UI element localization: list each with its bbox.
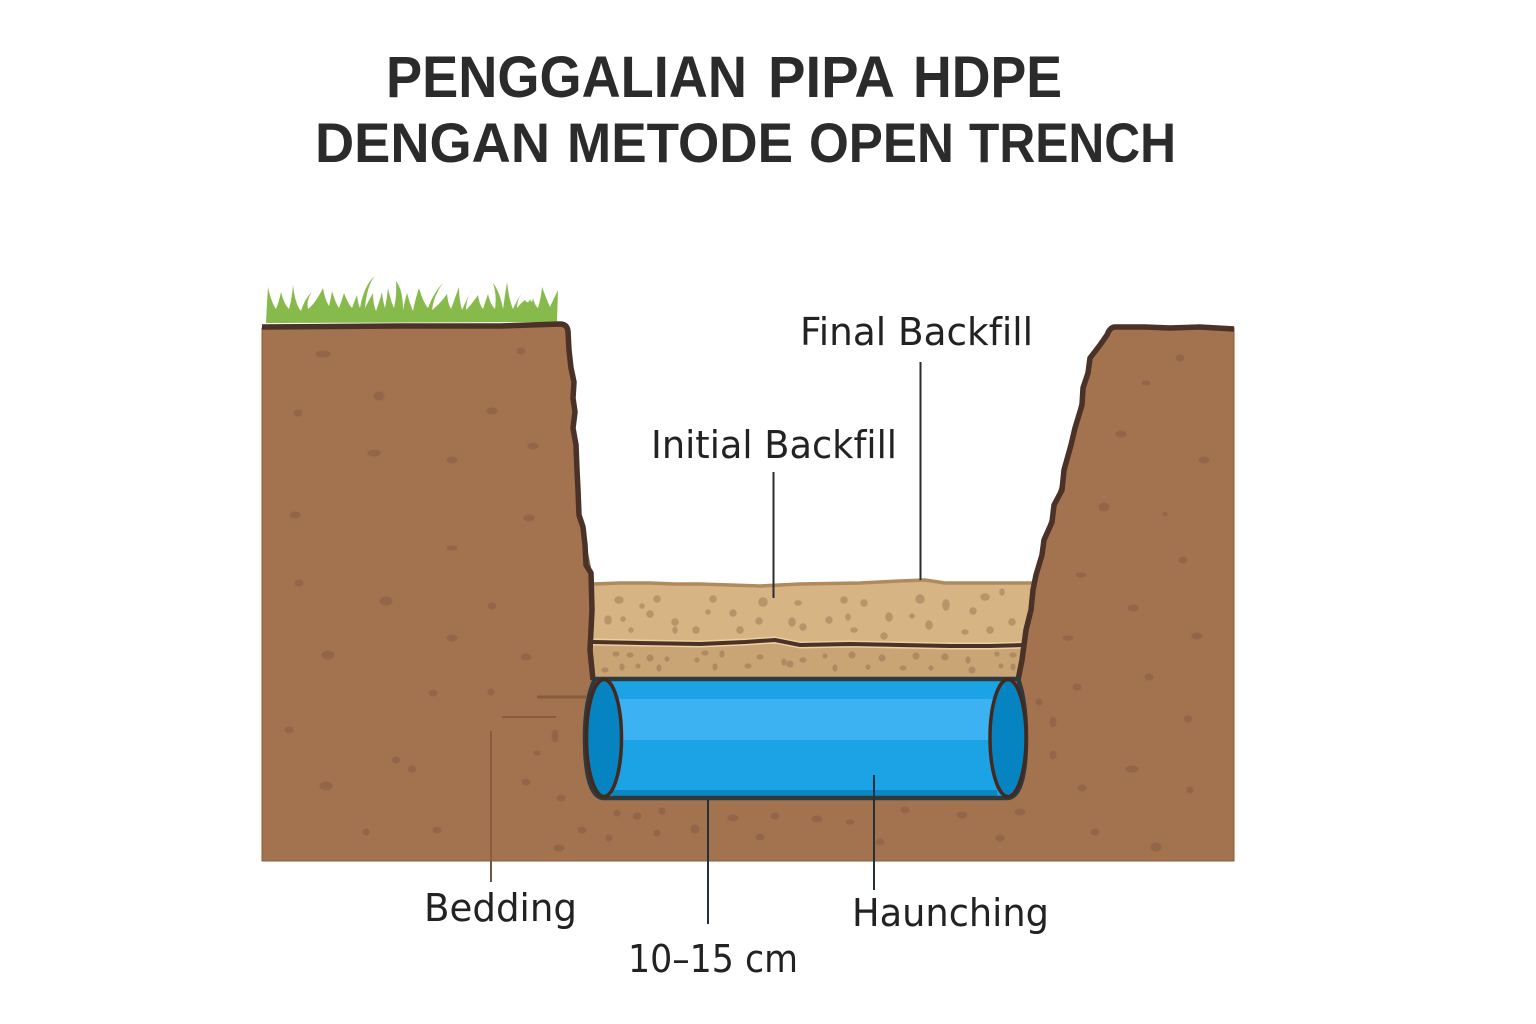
leader line: 10-15 cm [707,800,709,924]
title: TRENCH [969,111,1176,174]
title [315,45,1176,174]
initial backfill pebbles [602,651,1016,673]
soil scratch marks [502,697,586,717]
HDPE pipe [585,679,1026,798]
soil body [262,323,1234,861]
title: METODE [567,111,793,174]
label: 10-15 cm: 10–15 cm [628,937,798,981]
label: bedding: Bedding [424,886,577,930]
label: final backfill: Final Backfill [800,310,1033,354]
final backfill layer [593,580,1033,646]
title: DENGAN [315,111,550,174]
label: haunching: Haunching [852,891,1049,935]
soil speckles [285,348,1209,851]
title: PIPA [768,45,895,110]
title: PENGGALIAN [386,45,747,110]
leader line: final backfill [920,362,922,580]
leader line: initial backfill [772,472,774,598]
divider between backfill layers [593,640,1024,646]
title: HDPE [913,45,1062,110]
initial backfill layer [593,644,1025,680]
grass on left bank [266,276,558,323]
leader line: haunching [873,775,875,890]
title: OPEN [809,111,954,174]
label: initial backfill: Initial Backfill [651,423,897,467]
trench wall outlines [262,324,1234,680]
pipe left end [586,680,622,796]
leader line: bedding [490,731,492,882]
pipe right end [990,680,1026,796]
final backfill pebbles [605,589,1015,639]
